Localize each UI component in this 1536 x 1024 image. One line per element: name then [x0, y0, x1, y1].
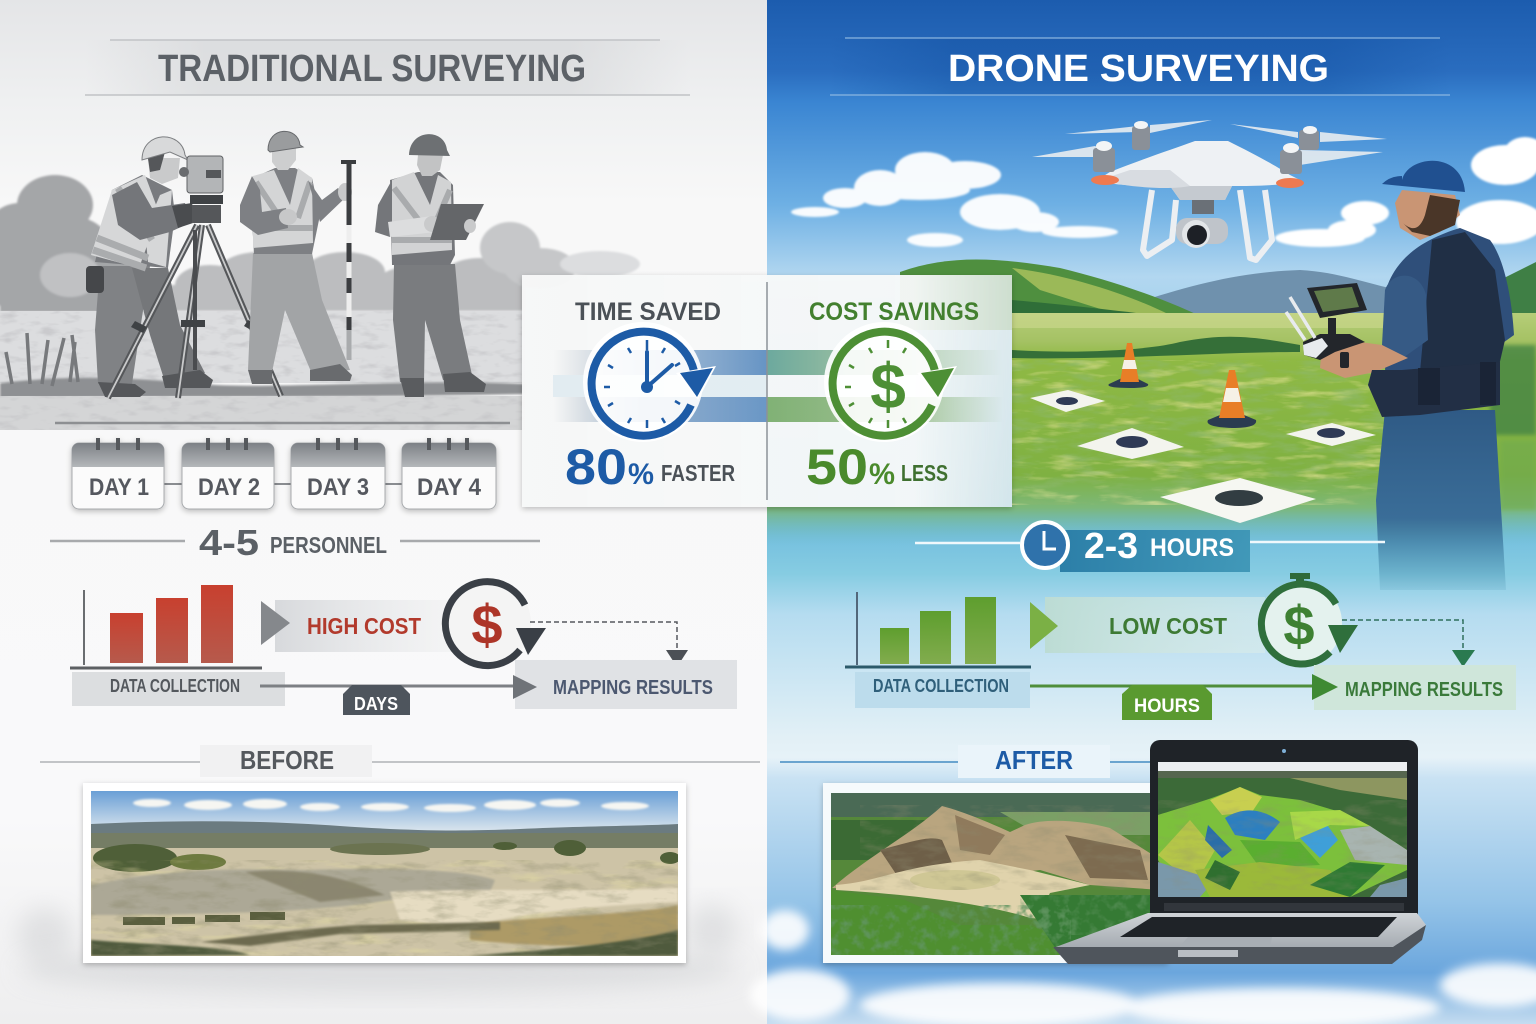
- panel: traditional surveying background: [0, 0, 768, 1024]
- calendars: day 1 to day 4: [72, 438, 496, 509]
- arrow: cost band drone: [1030, 597, 1265, 653]
- calendar: day 4: DAY 4: [417, 474, 482, 501]
- illustration: drone: [1032, 120, 1387, 260]
- label: data collection drone: [855, 672, 1030, 708]
- label: high cost: HIGH COST: [307, 613, 421, 639]
- stat: 80% faster: 80: [565, 439, 627, 495]
- heading: time saved: TIME SAVED: [575, 298, 721, 326]
- tag: days: DAYS: [354, 694, 398, 714]
- personnel count: [50, 522, 540, 563]
- time badge: 2-3 hours: 2-3: [1084, 525, 1138, 566]
- calendar: day 2: DAY 2: [198, 474, 260, 501]
- illustration: drone operator: [1286, 161, 1514, 590]
- calendar: day 4: [402, 438, 496, 509]
- label: mapping results drone: MAPPING RESULTS: [1345, 679, 1503, 701]
- heading: before: BEFORE: [240, 745, 334, 775]
- stat: 50% less: %: [869, 458, 895, 491]
- icon: dollar timer: $: [870, 350, 906, 422]
- icon: low cost dollar stopwatch: $: [1283, 594, 1315, 657]
- heading: after: AFTER: [995, 745, 1073, 775]
- tag: hours: HOURS: [1134, 696, 1200, 717]
- photo: after site: [823, 783, 1168, 963]
- bar chart: high cost: [70, 585, 262, 668]
- illustration: surveyor with ranging pole: [240, 131, 356, 384]
- heading: cost savings: COST SAVINGS: [809, 298, 979, 326]
- title: traditional surveying: TRADITIONAL SURVEYING: [158, 48, 586, 90]
- title: traditional surveying: [85, 40, 690, 95]
- bar chart: low cost: [845, 592, 1031, 667]
- scene: green hills and field: [767, 260, 1536, 545]
- stat: 50% less: LESS: [901, 460, 948, 486]
- label: data collection drone: DATA COLLECTION: [873, 676, 1009, 696]
- stat: 80% faster: FASTER: [661, 460, 735, 486]
- icon: high cost dollar cycle: $: [471, 593, 503, 656]
- icon: high cost dollar cycle: [443, 579, 546, 667]
- time badge: 2-3 hours: HOURS: [1150, 534, 1234, 562]
- illustration: surveyor with total station on tripod: [86, 137, 281, 398]
- calendar: day 3: [291, 438, 385, 509]
- illustration: surveyor with clipboard: [375, 134, 486, 397]
- icon: dollar timer: [824, 322, 957, 442]
- arrow: dashed line to drone mapping results: [1342, 620, 1475, 667]
- arrow: days to mapping results: [260, 675, 537, 699]
- icon: clock: [583, 322, 716, 442]
- icon: low cost dollar stopwatch: [1258, 573, 1358, 665]
- heading: after: [780, 745, 1150, 778]
- tag: hours: [1122, 685, 1212, 720]
- title: drone surveying: [830, 38, 1450, 95]
- heading: before: [40, 745, 760, 777]
- scene: survey targets and cones: [1030, 343, 1376, 523]
- scene: grey landscape behind crew: [0, 175, 640, 430]
- scene: sky clouds: [791, 137, 1536, 247]
- label: mapping results traditional: [515, 660, 737, 709]
- time badge: 2-3 hours: [915, 522, 1385, 572]
- label: mapping results drone: [1314, 665, 1516, 710]
- panel: drone surveying background: [767, 0, 1536, 1024]
- label: data collection traditional: [72, 672, 285, 706]
- label: mapping results traditional: MAPPING RESULTS: [553, 677, 713, 699]
- stat: 80% faster: [565, 439, 735, 495]
- illustration: laptop with terrain map: [1053, 740, 1426, 964]
- label: data collection traditional: DATA COLLECTION: [110, 676, 240, 696]
- stat: 50% less: [806, 439, 948, 495]
- photo: before site: [17, 783, 740, 994]
- calendar: day 1: [72, 438, 164, 509]
- scene: bottom clouds: [750, 910, 1536, 1024]
- tag: days: [343, 685, 410, 715]
- arrow: dashed line to mapping results: [530, 622, 688, 667]
- stat: 80% faster: %: [628, 458, 654, 491]
- personnel count: 4-5: [199, 522, 259, 563]
- chart bands: time saved: [553, 350, 767, 422]
- calendar: day 3: DAY 3: [307, 474, 369, 501]
- title: drone surveying: DRONE SURVEYING: [948, 48, 1329, 90]
- personnel count: PERSONNEL: [270, 532, 387, 558]
- arrow: cost band traditional: [261, 600, 465, 652]
- stat: 50% less: 50: [806, 439, 868, 495]
- calendar: day 1: DAY 1: [89, 474, 149, 501]
- label: low cost: LOW COST: [1109, 613, 1227, 639]
- calendar: day 2: [182, 438, 274, 509]
- arrow: hours to mapping results: [1030, 674, 1338, 700]
- chart bands: cost savings: [767, 350, 1003, 422]
- callout: comparison panel: [522, 275, 1012, 507]
